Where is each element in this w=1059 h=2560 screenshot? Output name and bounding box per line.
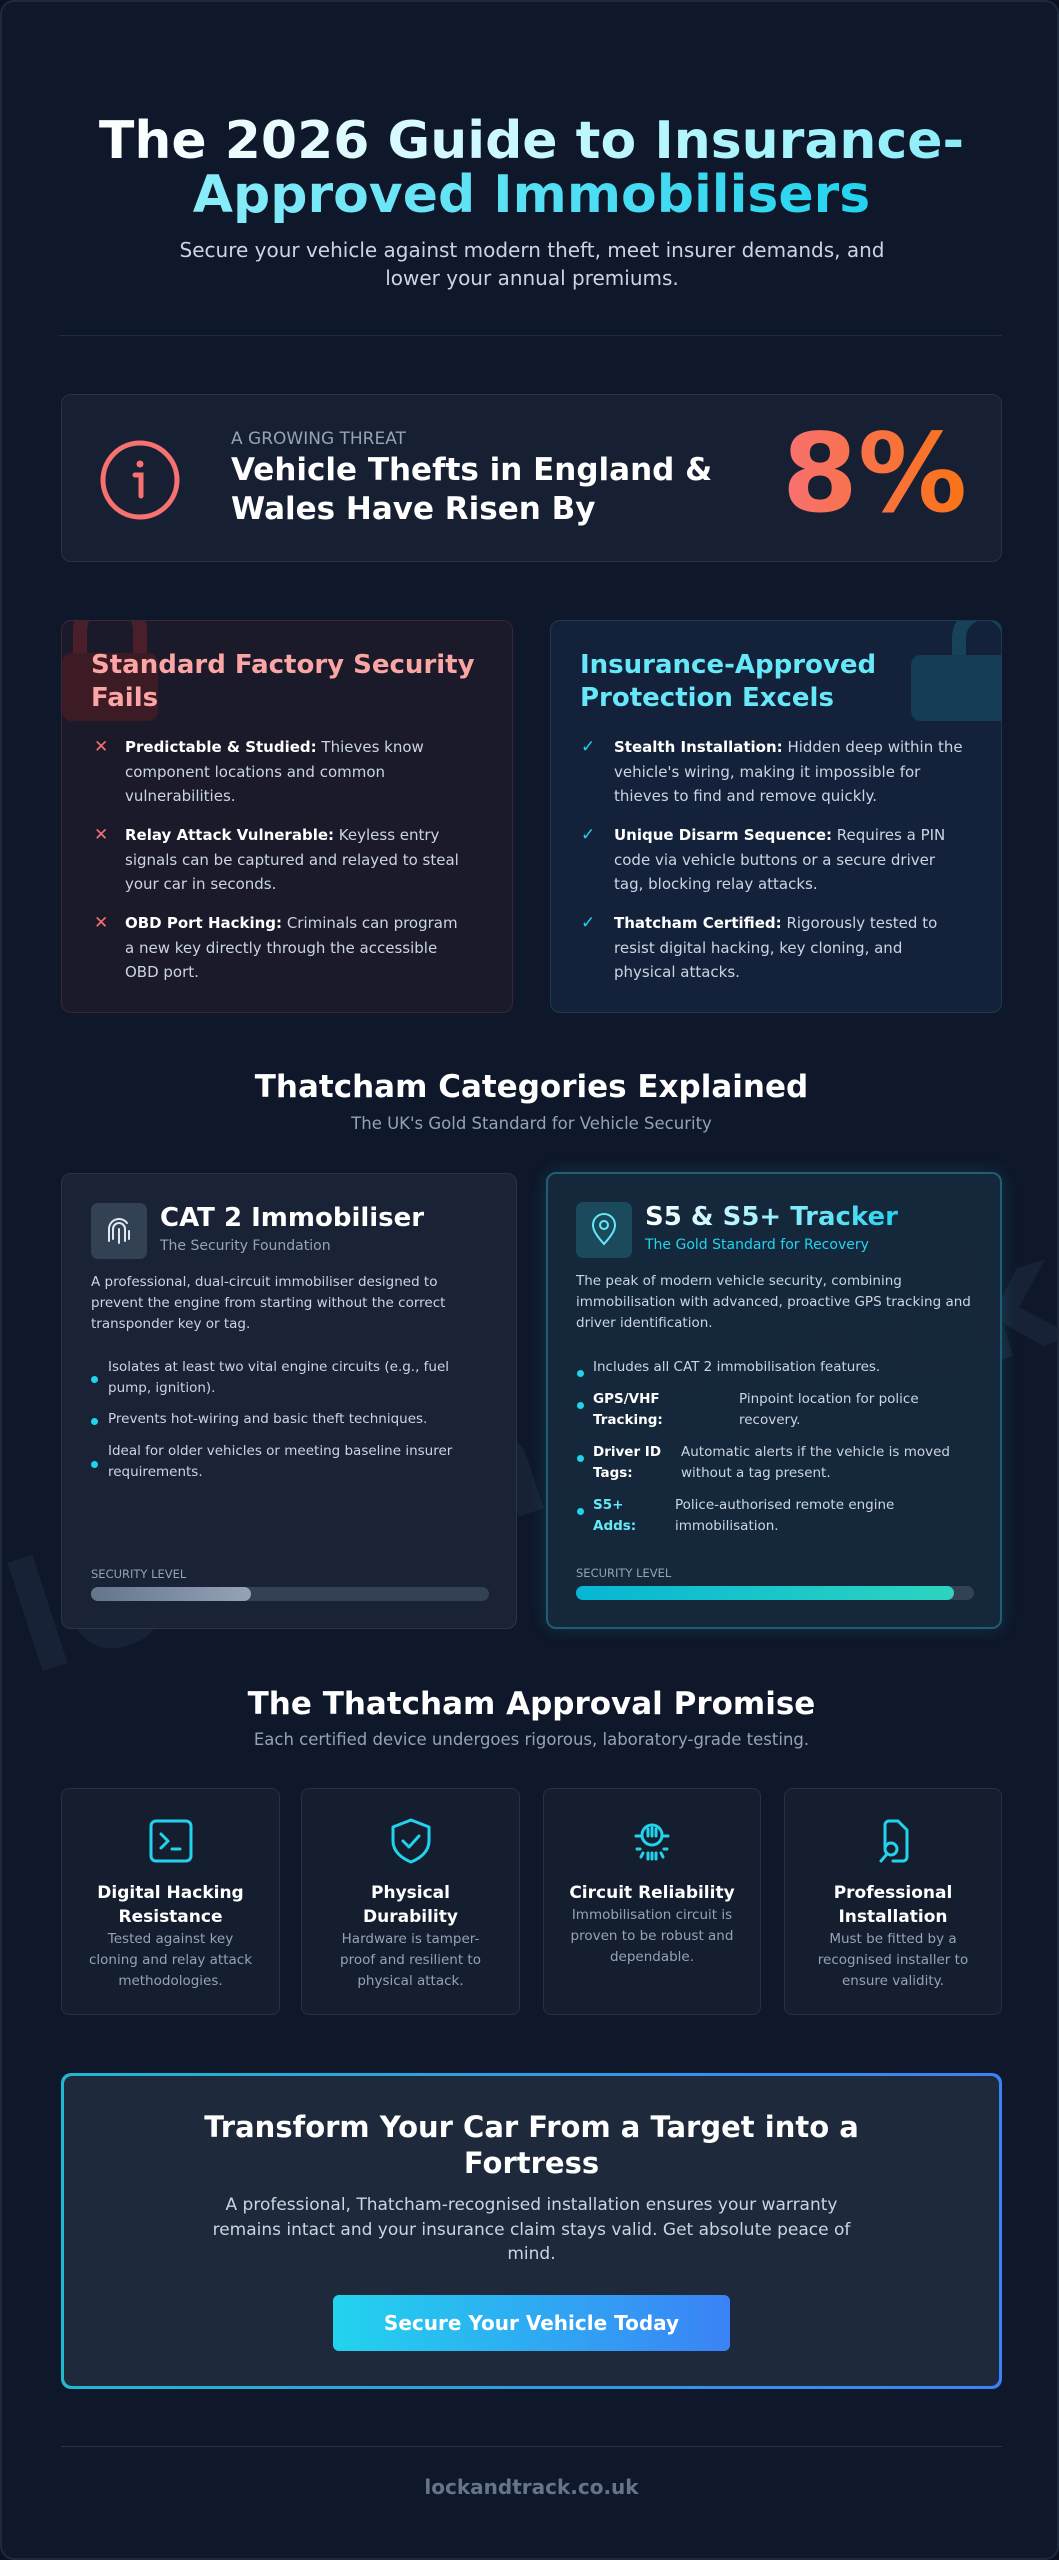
panel: standard factory security fails: Relay Attack Vulnerable: Keyless entry signals can be captured and relayed to steal your car in seconds. <box>125 826 459 893</box>
panel: S5 & S5+ tracker <box>546 1172 1002 1629</box>
subtitle: The Security Foundation <box>160 1238 331 1254</box>
panel: circuit reliability: Circuit Reliability <box>569 1883 735 1903</box>
title <box>99 111 964 225</box>
button: Secure Your Vehicle Today <box>384 2311 679 2335</box>
panel: insurance-approved protection excels: Unique Disarm Sequence: Requires a PIN code via vehicle buttons or a secure driver tag, blocking relay attacks. <box>614 826 945 893</box>
security level bar: SECURITY LEVEL <box>91 1567 186 1581</box>
bullet list: GPS/VHF Tracking: <box>593 1391 663 1428</box>
bullet list: Automatic alerts if the vehicle is moved without a tag present. <box>681 1444 950 1481</box>
panel: insurance-approved protection excels: ✓ <box>581 737 595 757</box>
subheading: approval: Each certified device undergoes rigorous, laboratory-grade testing. <box>254 1730 809 1749</box>
icon: terminal <box>150 1820 192 1862</box>
panel: professional installation <box>784 1788 1002 2015</box>
icon: file search <box>879 1820 908 1863</box>
panel: physical durability <box>301 1788 520 2015</box>
stat number: 8% <box>782 410 967 537</box>
item 3 <box>581 913 937 981</box>
bullet list <box>577 1359 950 1534</box>
panel: digital hacking resistance: Resistance <box>118 1907 222 1927</box>
title: CAT 2 Immobiliser <box>160 1203 424 1233</box>
panel: circuit reliability: Immobilisation circuit is proven to be robust and dependable. <box>571 1907 733 1965</box>
bullet list <box>91 1359 452 1480</box>
item 2 <box>94 825 459 893</box>
bullet list: Pinpoint location for police recovery. <box>739 1391 919 1428</box>
panel: insurance-approved protection excels <box>550 620 1002 1013</box>
panel: standard factory security fails: OBD Port Hacking: Criminals can program a new key directly through the accessible OBD port. <box>125 914 458 981</box>
subtitle: Secure your vehicle against modern theft, meet insurer demands, and lower your annual premiums. <box>180 238 884 290</box>
panel: physical durability: Durability <box>363 1907 458 1927</box>
panel: standard factory security fails: ✕ <box>94 825 108 845</box>
stat card: vehicle thefts <box>61 394 1002 562</box>
icon: fingerprint <box>91 1203 147 1259</box>
item 1 <box>94 737 424 805</box>
panel: standard factory security fails: Predictable & Studied: Thieves know component locations and common vulnerabilities. <box>125 738 424 805</box>
CTA heading: Transform Your Car From a Target into a Fortress <box>204 2110 859 2180</box>
panel: standard factory security fails: ✕ <box>94 913 108 933</box>
title: Approved Immobilisers <box>193 165 870 225</box>
heading: approval promise: The Thatcham Approval Promise <box>248 1686 815 1722</box>
description: The peak of modern vehicle security, combining immobilisation with advanced, proactive GPS tracking and driver identification. <box>576 1273 971 1331</box>
panel: insurance-approved protection excels: ✓ <box>581 825 595 845</box>
panel: professional installation: Must be fitted by a recognised installer to ensure validity. <box>818 1931 968 1989</box>
panel: standard factory security fails: ✕ <box>94 737 108 757</box>
bullet list: Prevents hot-wiring and basic theft techniques. <box>108 1411 427 1427</box>
panel: insurance-approved protection excels: Stealth Installation: Hidden deep within the vehicle's wiring, making it impossible for thieves to find and remove quickly. <box>614 738 963 805</box>
heading: Insurance-Approved Protection Excels <box>580 650 876 713</box>
icon: info circle <box>100 440 180 520</box>
item 3 <box>94 913 458 981</box>
title: The 2026 Guide to Insurance- <box>99 111 964 171</box>
subheading: categories: The UK's Gold Standard for Vehicle Security <box>351 1114 712 1133</box>
panel: physical durability: Physical <box>371 1883 450 1903</box>
panel: digital hacking resistance: Digital Hacking <box>97 1883 244 1903</box>
callout: CTA <box>61 2073 1002 2389</box>
security level bar <box>91 1567 489 1601</box>
icon: location pin <box>576 1202 632 1258</box>
stat label: A GROWING THREAT <box>231 429 406 449</box>
subtitle: The Gold Standard for Recovery <box>645 1237 869 1253</box>
bullet list: Includes all CAT 2 immobilisation features. <box>593 1359 880 1375</box>
panel: physical durability: Hardware is tamper-proof and resilient to physical attack. <box>340 1931 481 1989</box>
panel: circuit reliability <box>543 1788 761 2015</box>
security level bar <box>576 1566 974 1600</box>
icon: unlocked lock watermark cyan <box>911 621 1001 721</box>
panel: professional installation: Professional <box>834 1883 952 1903</box>
panel: insurance-approved protection excels: Thatcham Certified: Rigorously tested to resist digital hacking, key cloning, and physical attacks. <box>614 914 937 981</box>
bullet list: Isolates at least two vital engine circuits (e.g., fuel pump, ignition). <box>108 1359 449 1396</box>
panel: professional installation: Installation <box>838 1907 948 1927</box>
panel: S5 & S5+ tracker: S5+ Adds: <box>593 1497 636 1534</box>
panel: standard factory security fails <box>61 620 513 1013</box>
panel: insurance-approved protection excels: ✓ <box>581 913 595 933</box>
panel: digital hacking resistance: Tested against key cloning and relay attack methodologies. <box>89 1931 252 1989</box>
bullet list: Ideal for older vehicles or meeting baseline insurer requirements. <box>108 1443 452 1480</box>
title: S5 & S5+ Tracker <box>645 1202 898 1232</box>
CTA text: A professional, Thatcham-recognised installation ensures your warranty remains intact and your insurance claim stays valid. Get absolute peace of mind. <box>213 2195 850 2264</box>
panel: digital hacking resistance <box>61 1788 280 2015</box>
bullet list: Driver ID Tags: <box>593 1444 661 1481</box>
panel: S5 & S5+ tracker: Police-authorised remote engine immobilisation. <box>675 1497 894 1534</box>
stat heading: Vehicle Thefts in England & Wales Have Risen By <box>231 452 712 527</box>
heading: thatcham categories: Thatcham Categories Explained <box>255 1069 808 1105</box>
item 1 <box>581 737 963 805</box>
footer: lockandtrack.co.uk <box>424 2475 639 2499</box>
description: A professional, dual-circuit immobiliser designed to prevent the engine from starting without the correct transponder key or tag. <box>91 1274 445 1332</box>
heading: Standard Factory Security Fails <box>91 650 475 713</box>
icon: shield check <box>392 1818 430 1864</box>
security level bar: SECURITY LEVEL <box>576 1566 671 1580</box>
icon: lock watermark red <box>62 621 158 721</box>
button <box>333 2295 730 2351</box>
panel: CAT 2 immobiliser <box>61 1173 517 1629</box>
icon: circuit chip <box>634 1824 670 1860</box>
item 2 <box>581 825 945 893</box>
